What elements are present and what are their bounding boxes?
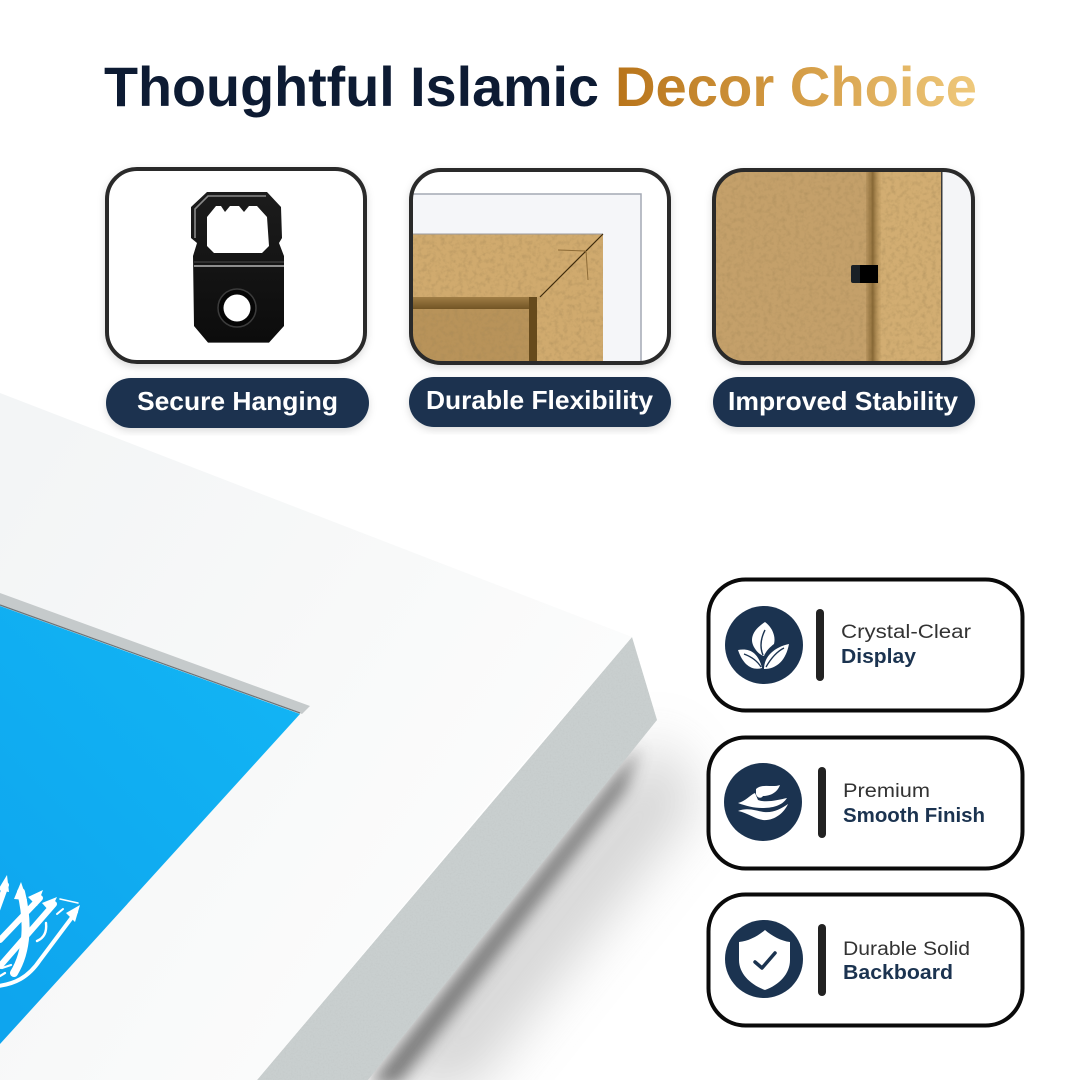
card border [107, 169, 365, 362]
divider bar [818, 767, 826, 838]
MDF board back [716, 172, 941, 361]
divider bar [818, 924, 826, 996]
feature text: Crystal-Clear [841, 622, 972, 643]
frame top face [0, 393, 632, 1080]
label: durable flexibility: Durable Flexibility [426, 385, 654, 415]
label: secure hanging: Secure Hanging [137, 386, 338, 416]
feature text: Premium [843, 781, 930, 802]
icon: shield with check [725, 920, 803, 998]
blue artwork [0, 605, 300, 1044]
icon: black sawtooth hanger [191, 192, 284, 343]
feature text: Backboard [843, 962, 953, 984]
feature text: Smooth Finish [843, 805, 985, 827]
frame side face [257, 637, 657, 1080]
title: Thoughtful Islamic [104, 55, 599, 118]
card border [411, 170, 669, 363]
icon: black turn clip [851, 265, 878, 283]
label: improved stability [713, 377, 975, 427]
panel: improved stability [710, 165, 977, 370]
feature text: Durable Solid [843, 939, 970, 960]
icon: smoothing waves [724, 763, 802, 841]
panel: secure hanging [105, 167, 367, 364]
white picture frame corner [0, 393, 700, 1080]
divider bar [816, 609, 824, 681]
frame inner bevel [0, 593, 310, 714]
feature text [841, 622, 972, 668]
white calligraphy [0, 875, 80, 986]
card border [714, 170, 973, 363]
label: improved stability: Improved Stability [728, 386, 959, 416]
title: Decor Choice [615, 55, 977, 118]
feature card: premium smooth finish [708, 738, 1022, 868]
MDF backing board corner [405, 234, 603, 369]
panel: durable flexibility [405, 168, 671, 369]
label: secure hanging [106, 378, 369, 428]
label: durable flexibility [409, 377, 671, 427]
frame edge strip [942, 172, 971, 361]
frame drop shadow [368, 735, 700, 1080]
white mat [405, 194, 641, 369]
icon: leaves [725, 606, 803, 684]
feature card: crystal-clear display [708, 580, 1022, 710]
feature text [843, 939, 970, 984]
feature card: durable solid backboard [708, 894, 1022, 1026]
title [104, 55, 977, 118]
feature text: Display [841, 646, 917, 668]
feature text [843, 781, 985, 827]
